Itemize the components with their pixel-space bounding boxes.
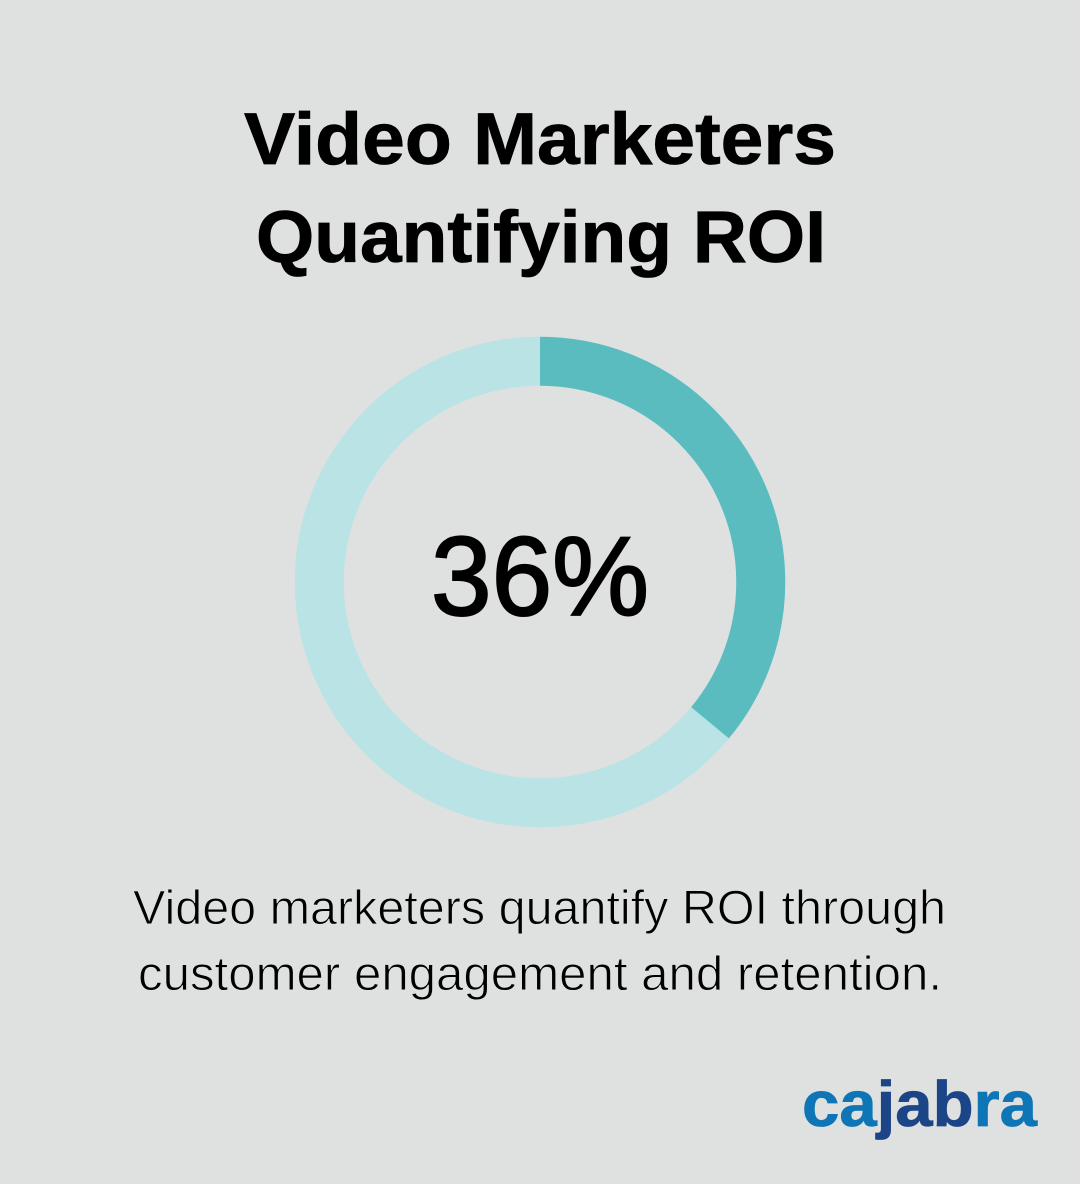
logo: cajabra: cajabra	[802, 1068, 1037, 1140]
title: Quantifying ROI	[256, 197, 826, 278]
title	[244, 99, 836, 278]
title: Video Marketers	[244, 99, 836, 180]
description text	[133, 882, 946, 1001]
description text: Video marketers quantify ROI through	[133, 882, 946, 935]
value: 36%: 36%	[431, 514, 649, 639]
description text: customer engagement and retention.	[138, 948, 942, 1001]
donut chart: 36%	[319, 361, 761, 803]
